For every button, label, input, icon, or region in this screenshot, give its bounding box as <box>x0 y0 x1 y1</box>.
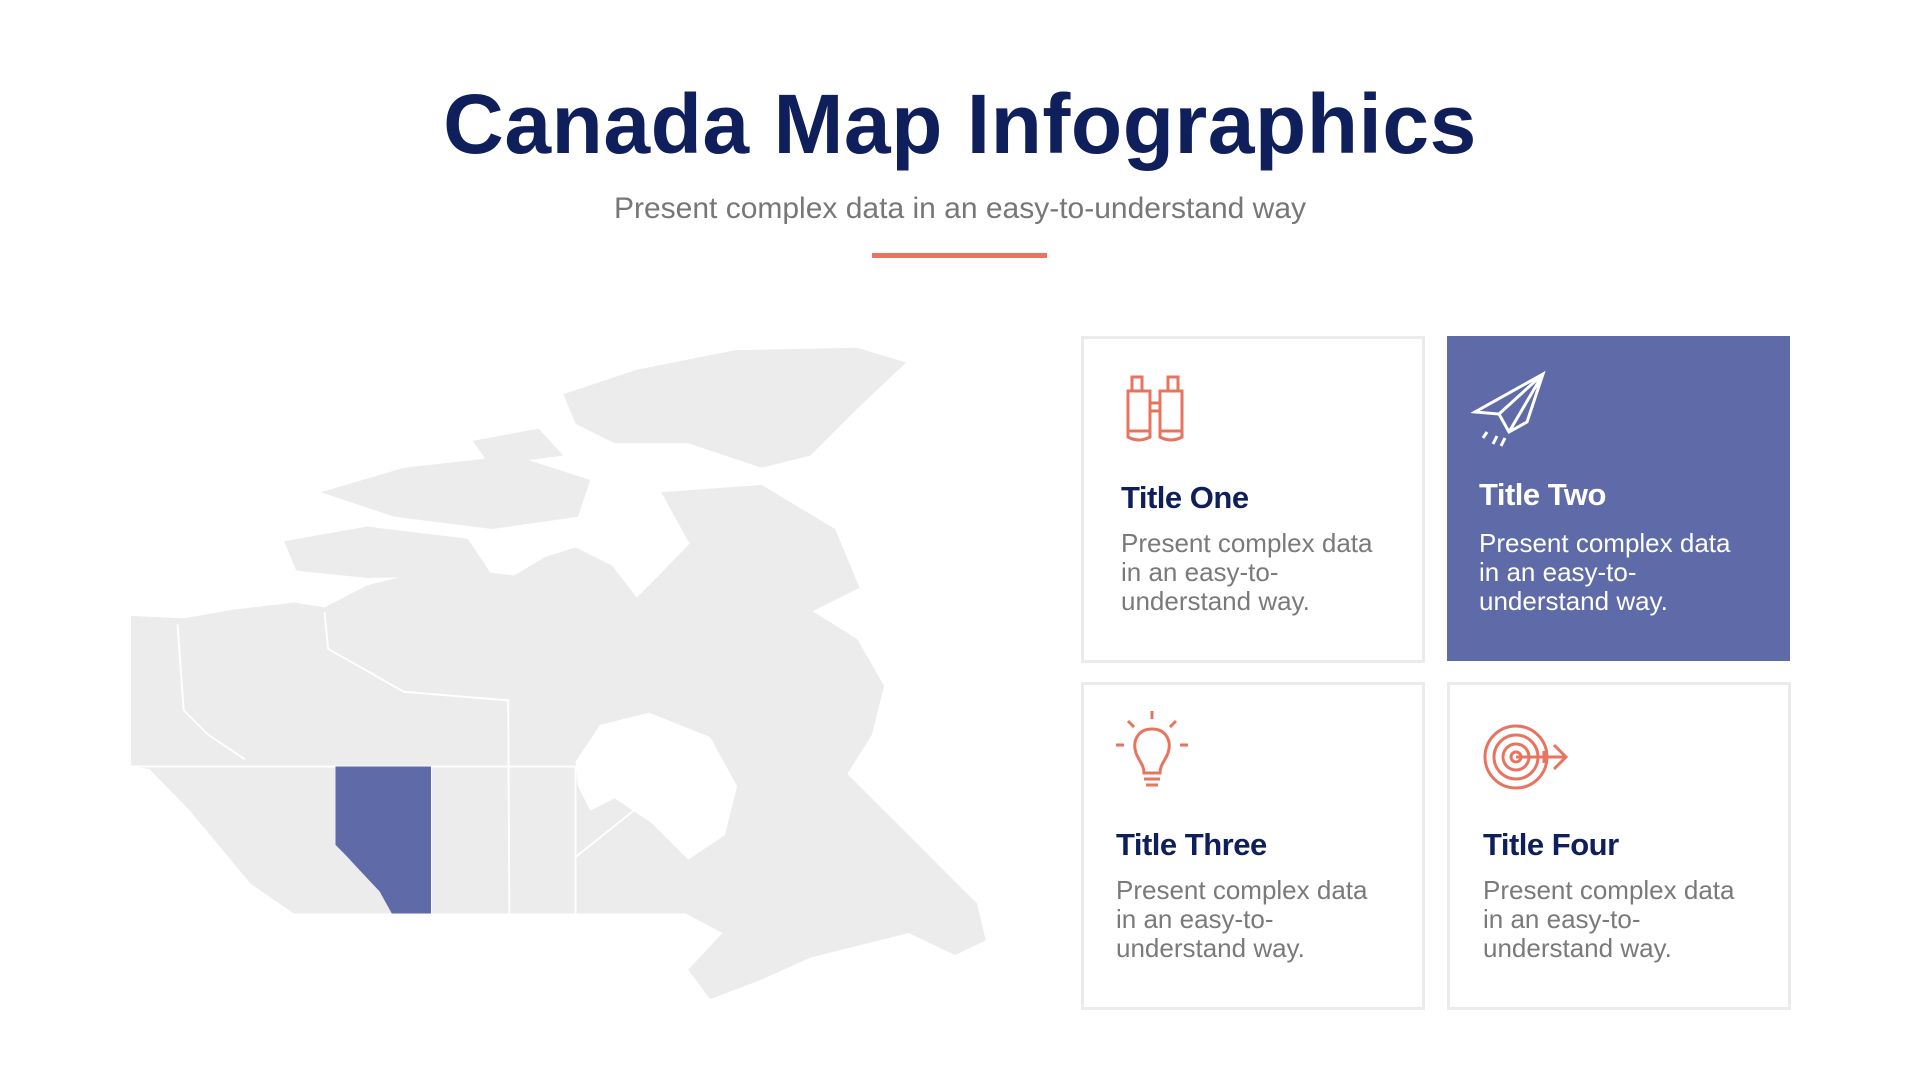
card: Title Two: understand way. <box>1479 586 1668 616</box>
card: Title Three: Present complex data <box>1116 875 1367 905</box>
card: Title Four: understand way. <box>1483 933 1672 963</box>
card: Title Three: understand way. <box>1116 933 1305 963</box>
card: Title Three <box>1081 682 1425 1010</box>
icon: paper plane <box>1471 370 1546 447</box>
accent line <box>872 253 1047 258</box>
card: Title One: Present complex data <box>1121 528 1372 558</box>
card: Title Four <box>1447 682 1791 1010</box>
card: Title One <box>1081 336 1425 663</box>
subtitle: Present complex data in an easy-to-understand way <box>614 192 1306 225</box>
card: Title Three: in an easy-to- <box>1116 904 1274 934</box>
card: Title One: in an easy-to- <box>1121 557 1279 587</box>
icon: binoculars <box>1126 376 1184 442</box>
card: Title One: Title One <box>1121 480 1249 515</box>
Alberta highlight <box>336 767 431 913</box>
card: Title Four: in an easy-to- <box>1483 904 1641 934</box>
card: Title One: understand way. <box>1121 586 1310 616</box>
icon: target <box>1484 724 1568 790</box>
card: Title Two: Present complex data <box>1479 528 1730 558</box>
card: Title Two <box>1447 336 1790 661</box>
card: Title Two: in an easy-to- <box>1479 557 1637 587</box>
card: Title Four: Title Four <box>1483 827 1619 862</box>
Hudson Bay <box>576 713 737 860</box>
icon: light bulb <box>1116 711 1188 786</box>
card: Title Three: Title Three <box>1116 827 1267 862</box>
card: Title Two: Title Two <box>1479 477 1606 512</box>
card: Title Four: Present complex data <box>1483 875 1734 905</box>
title: Canada Map Infographics <box>443 77 1477 171</box>
